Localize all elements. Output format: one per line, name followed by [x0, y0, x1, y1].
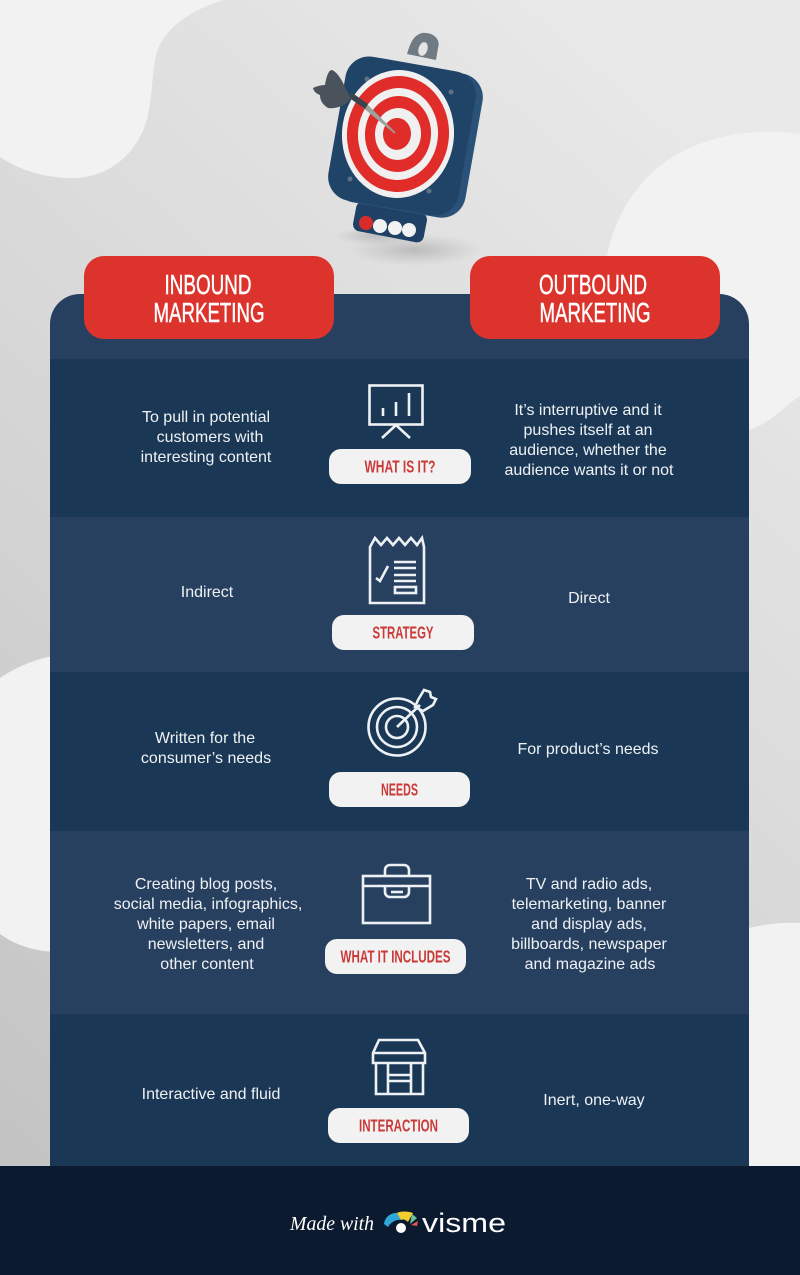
text: inbound includes: white papers, email — [136, 916, 275, 933]
text: outbound what is it: pushes itself at an — [524, 422, 652, 439]
logo: visme — [384, 1208, 506, 1238]
text: inbound strategy: Indirect — [181, 584, 234, 601]
text: inbound includes: social media, infographics, — [114, 896, 302, 913]
text: outbound includes: telemarketing, banner — [512, 896, 667, 913]
text: inbound needs: consumer’s needs — [141, 750, 271, 767]
text: inbound includes: Creating blog posts, — [135, 876, 277, 893]
label: needs — [329, 772, 470, 807]
label: interaction: INTERACTION — [359, 1116, 438, 1136]
heading: outbound marketing — [470, 256, 720, 339]
heading: outbound marketing: MARKETING — [540, 297, 650, 328]
text: outbound strategy: Direct — [568, 590, 610, 607]
panel: comparison table — [50, 294, 749, 1166]
label: strategy — [332, 615, 474, 650]
text: inbound interaction: Interactive and fluid — [142, 1086, 280, 1103]
text: outbound what is it: It’s interruptive and it — [514, 402, 662, 419]
label: strategy: STRATEGY — [372, 622, 434, 642]
label: what is it: WHAT IS IT? — [364, 456, 436, 476]
icon: storefront — [373, 1040, 425, 1094]
heading: inbound marketing: INBOUND — [164, 269, 252, 300]
logo: visme: visme — [422, 1208, 506, 1238]
text: outbound includes: billboards, newspaper — [511, 936, 667, 953]
heading: outbound marketing: OUTBOUND — [539, 269, 647, 300]
text: inbound needs: Written for the — [155, 730, 255, 747]
icon: presentation board — [370, 386, 422, 438]
label: what it includes — [325, 939, 466, 974]
label: what it includes: WHAT IT INCLUDES — [340, 946, 450, 966]
label: interaction — [328, 1108, 469, 1143]
text: inbound what is it: To pull in potential — [142, 409, 270, 426]
text: inbound what is it: interesting content — [141, 449, 272, 466]
text: outbound includes: TV and radio ads, — [526, 876, 652, 893]
text: outbound includes: and magazine ads — [525, 956, 655, 973]
icon: target and dart — [368, 690, 436, 756]
icon: briefcase — [363, 865, 430, 923]
heading: inbound marketing — [84, 256, 334, 339]
text: outbound what is it: audience, whether the — [509, 442, 667, 459]
illustration: dartboard — [313, 33, 487, 266]
text: made with: Made with — [289, 1213, 374, 1235]
text: outbound needs: For product’s needs — [517, 741, 659, 758]
text: outbound what is it: audience wants it or not — [504, 462, 674, 479]
heading: inbound marketing: MARKETING — [154, 297, 264, 328]
label: what is it — [329, 449, 471, 484]
text: outbound includes: and display ads, — [531, 916, 647, 933]
text: outbound interaction: Inert, one-way — [543, 1092, 645, 1109]
footer — [0, 1166, 800, 1275]
text: inbound includes: newsletters, and — [148, 936, 264, 953]
icon: receipt checklist — [370, 538, 424, 603]
text: inbound what is it: customers with — [157, 429, 263, 446]
label: needs: NEEDS — [381, 780, 418, 800]
text: inbound includes: other content — [160, 956, 254, 973]
